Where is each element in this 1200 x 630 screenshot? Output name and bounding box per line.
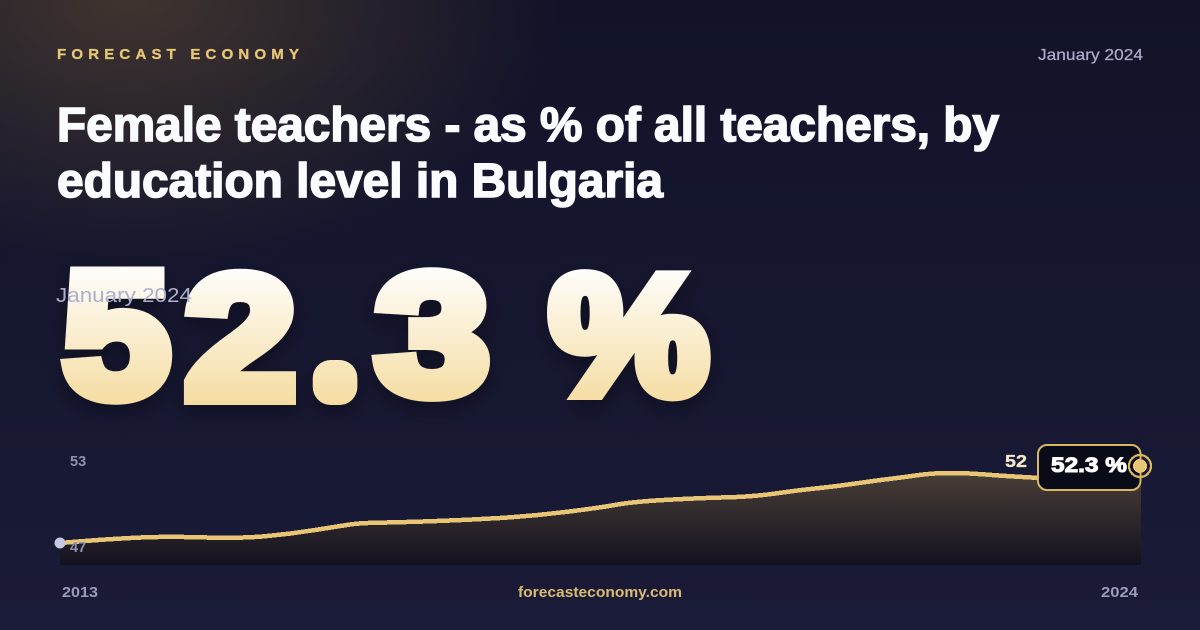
value label 52: 52 <box>1005 451 1027 471</box>
website: forecasteconomy.com <box>518 584 682 601</box>
value callout: 52.3 % <box>1051 454 1127 477</box>
y axis min label: 47 <box>70 540 86 556</box>
big value <box>63 235 708 436</box>
chart line <box>60 473 1040 543</box>
end point marker <box>1129 455 1151 477</box>
chart area fill <box>60 473 1141 565</box>
x axis end label: 2024 <box>1101 584 1139 601</box>
x axis start label: 2013 <box>62 584 98 601</box>
y axis max label: 53 <box>70 454 86 470</box>
big value: 5 <box>63 235 170 434</box>
big value: 2 <box>185 241 296 436</box>
title: education level in Bulgaria <box>57 155 663 208</box>
area chart <box>54 473 1141 565</box>
title: Female teachers - as % of all teachers, by <box>57 99 999 152</box>
brand label: FORECAST ECONOMY <box>57 46 299 63</box>
big value: % <box>550 241 708 429</box>
start point <box>54 538 66 548</box>
title <box>57 99 999 208</box>
date top right: January 2024 <box>1038 47 1143 64</box>
date overlay: January 2024 <box>56 285 192 307</box>
big value: . <box>327 333 343 400</box>
big value: 3 <box>376 240 489 430</box>
value callout <box>1038 445 1140 490</box>
